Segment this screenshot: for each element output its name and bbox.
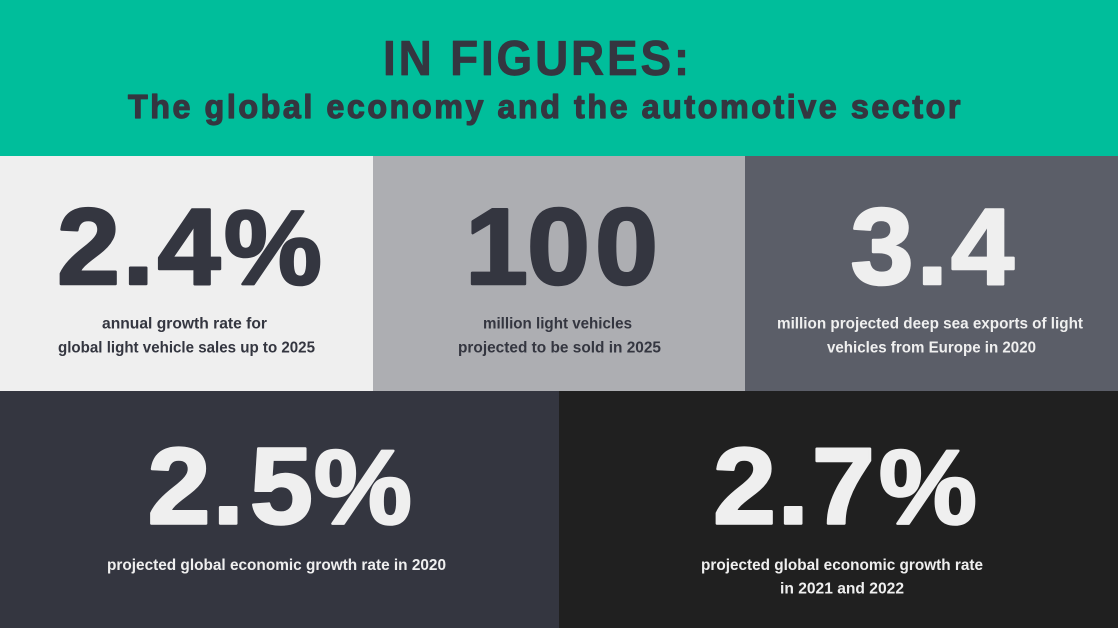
panel: 2.5% economic growth <box>0 391 559 628</box>
figure: 100: 100 <box>465 185 658 308</box>
panel: 3.4 million <box>745 156 1118 391</box>
caption: annual growth rate for <box>102 316 267 332</box>
title: IN FIGURES: <box>383 32 692 86</box>
caption: vehicles from Europe in 2020 <box>827 340 1036 356</box>
caption <box>458 316 661 356</box>
caption <box>701 557 983 598</box>
subtitle: The global economy and the automotive sector <box>128 88 963 125</box>
caption: projected to be sold in 2025 <box>458 340 661 356</box>
figure: 3.4: 3.4 <box>851 185 1014 308</box>
figure: 2.5%: 2.5% <box>147 424 412 547</box>
panel: 2.7% economic growth <box>559 391 1118 628</box>
figure: 2.7%: 2.7% <box>713 424 977 547</box>
header panel <box>0 0 1118 156</box>
caption: global light vehicle sales up to 2025 <box>58 340 315 356</box>
panel: 2.4% annual growth <box>0 156 373 391</box>
panel: 100 million <box>373 156 745 391</box>
caption: million light vehicles <box>483 316 632 332</box>
figure: 2.4%: 2.4% <box>57 185 322 308</box>
caption: in 2021 and 2022 <box>780 580 904 598</box>
caption: million projected deep sea exports of light <box>777 316 1084 332</box>
caption <box>58 316 315 356</box>
caption: projected global economic growth rate <box>701 557 983 574</box>
caption: projected global economic growth rate in 2020 <box>107 557 446 574</box>
caption <box>777 316 1084 356</box>
